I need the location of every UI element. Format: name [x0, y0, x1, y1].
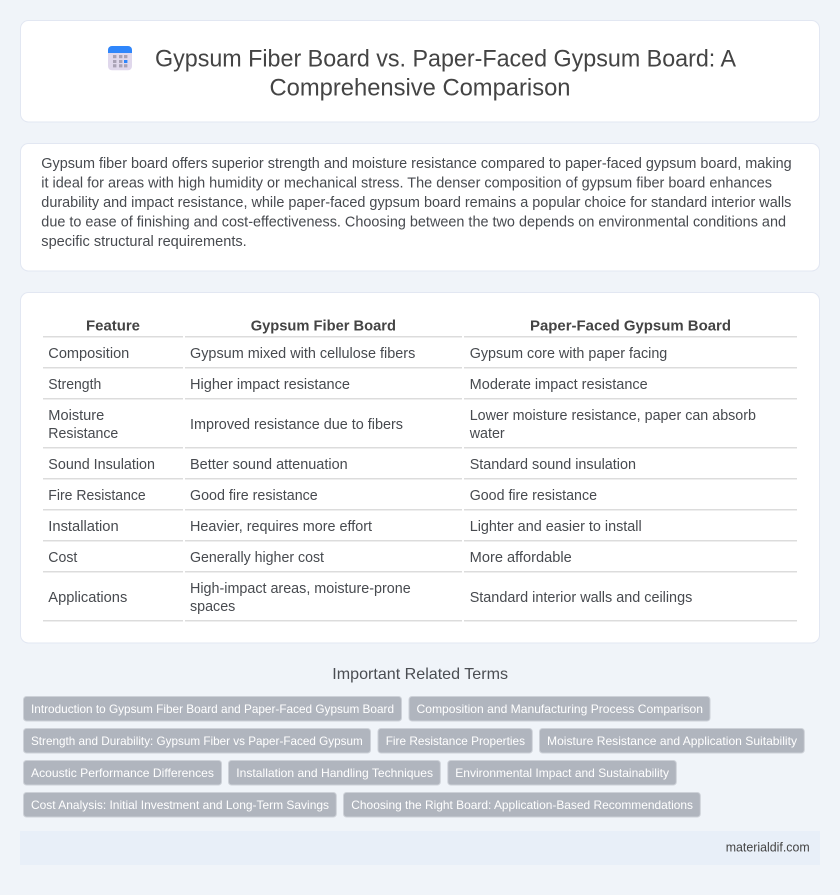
row: strength: Moderate impact resistance [470, 377, 648, 393]
table header: Gypsum Fiber Board [251, 318, 396, 335]
footer [20, 831, 820, 865]
row: applications: Standard interior walls and ceilings [470, 590, 692, 606]
related term chips: Acoustic Performance Differences [31, 766, 214, 780]
related term chips: Introduction to Gypsum Fiber Board and Paper-Faced Gypsum Board [31, 702, 394, 716]
row: sound insulation: Standard sound insulation [470, 457, 636, 473]
row: moisture resistance [48, 408, 756, 442]
icon: calendar [108, 46, 132, 70]
row: installation: Installation [48, 519, 119, 535]
related term chips: Composition and Manufacturing Process Comparison [416, 702, 703, 716]
text block: introduction paragraph: durability and impact resistance, while paper-faced gypsum board remains a popular choice for standard interior walls [41, 195, 791, 211]
row: moisture resistance: Improved resistance due to fibers [190, 417, 403, 433]
panel: comparison table [20, 292, 820, 643]
title: Comprehensive Comparison [270, 74, 570, 102]
row: composition: Composition [48, 346, 129, 362]
row: strength: Higher impact resistance [190, 377, 350, 393]
related term chips [24, 696, 804, 817]
row: installation: Heavier, requires more effort [190, 519, 372, 535]
text block: introduction paragraph: Gypsum fiber board offers superior strength and moisture resistance compared to paper-faced gypsum board, making [41, 156, 792, 172]
row: composition: Gypsum core with paper facing [470, 346, 667, 362]
panel: title header [20, 20, 820, 122]
related term chips: Installation and Handling Techniques [236, 766, 433, 780]
row: moisture resistance: Resistance [48, 426, 118, 442]
related term chips: Strength and Durability: Gypsum Fiber vs Paper-Faced Gypsum [31, 734, 363, 748]
panel: introduction [20, 144, 820, 271]
related term chips: Environmental Impact and Sustainability [455, 766, 669, 780]
row: applications: High-impact areas, moisture-prone [190, 581, 411, 597]
related term chips: Cost Analysis: Initial Investment and Long-Term Savings [31, 798, 329, 812]
row: fire resistance: Good fire resistance [470, 488, 597, 504]
row: sound insulation [48, 457, 636, 473]
row: composition: Gypsum mixed with cellulose fibers [190, 346, 415, 362]
row: cost: Cost [48, 550, 77, 566]
row: applications [48, 581, 692, 615]
row: moisture resistance: Moisture [48, 408, 104, 424]
related term chips: Choosing the Right Board: Application-Based Recommendations [351, 798, 693, 812]
row: strength [48, 377, 648, 393]
text block: introduction paragraph: it ideal for areas with high humidity or mechanical stress. The denser composition of gypsum fiber board enhances [41, 176, 772, 192]
title [155, 46, 736, 102]
table header [86, 318, 731, 335]
row: strength: Strength [48, 377, 101, 393]
text block: introduction paragraph [41, 156, 792, 250]
row: cost: More affordable [470, 550, 572, 566]
row: installation [48, 519, 642, 535]
footer: materialdif.com [726, 841, 810, 855]
row: sound insulation: Better sound attenuation [190, 457, 348, 473]
row: applications: Applications [48, 590, 127, 606]
row: installation: Lighter and easier to install [470, 519, 642, 535]
row: composition [48, 346, 667, 362]
text block: introduction paragraph: specific structural requirements. [41, 234, 247, 250]
table header: Feature [86, 318, 140, 335]
row: sound insulation: Sound Insulation [48, 457, 155, 473]
row: fire resistance [48, 488, 597, 504]
text block: introduction paragraph: due to ease of finishing and cost-effectiveness. Choosing between the two depends on environmental conditions and [41, 214, 786, 230]
title: Gypsum Fiber Board vs. Paper-Faced Gypsum Board: A [155, 46, 736, 72]
row: moisture resistance: water [469, 426, 505, 442]
row: fire resistance: Good fire resistance [190, 488, 318, 504]
row: cost: Generally higher cost [190, 550, 324, 566]
row: fire resistance: Fire Resistance [48, 488, 146, 504]
heading: important related terms: Important Related Terms [332, 666, 508, 683]
related term chips: Fire Resistance Properties [386, 734, 525, 748]
row: cost [48, 550, 572, 566]
related term chips: Moisture Resistance and Application Suitability [547, 734, 797, 748]
table header: Paper-Faced Gypsum Board [530, 318, 731, 335]
row: moisture resistance: Lower moisture resistance, paper can absorb [470, 408, 756, 424]
row: applications: spaces [190, 599, 235, 615]
